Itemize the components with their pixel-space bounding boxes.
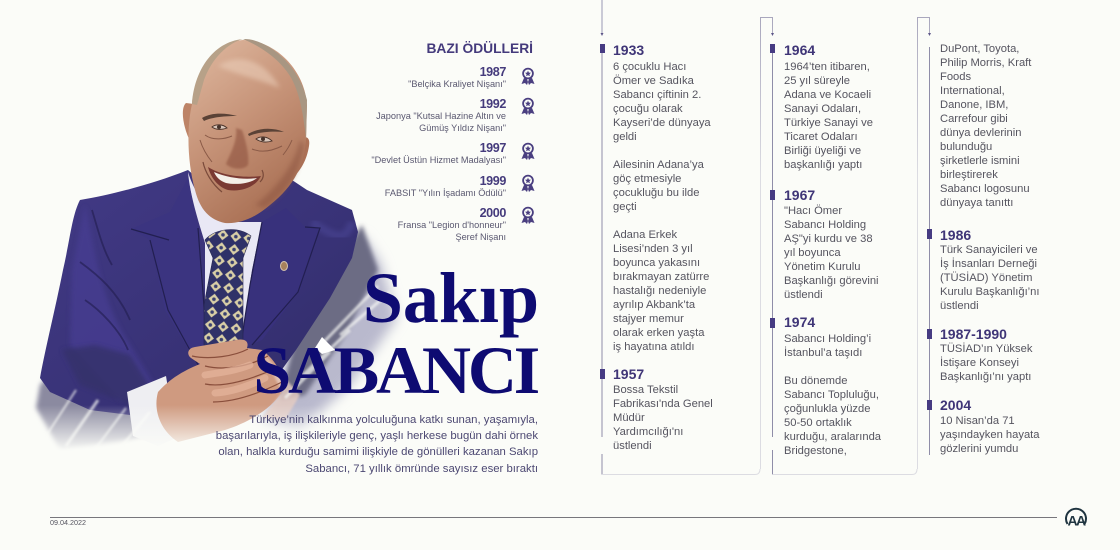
text 1974 [784, 333, 881, 457]
text 1986: (TÜSİAD) Yönetim [940, 272, 1032, 284]
text 1933 [613, 61, 711, 353]
year 1957: 1957 [613, 366, 644, 382]
award 1999: 1999 [480, 174, 506, 188]
text 1987-1990: Başkanlığı’nı yaptı [940, 371, 1031, 383]
intro paragraph: Türkiye’nin kalkınma yolculuğuna katkı sunan, yaşamıyla, [249, 414, 538, 426]
text 1967: yıl boyunca [784, 247, 841, 259]
text 1987-1990: İstişare Konseyi [940, 357, 1019, 369]
timeline column 1 [613, 42, 713, 452]
text continued: dünya devlerinin [940, 127, 1021, 139]
name title: Sakıp [363, 258, 539, 338]
text 1964: 1964’ten itibaren, [784, 61, 870, 73]
awards heading: BAZI ÖDÜLLERİ [426, 41, 533, 56]
text 1974: 50-50 ortaklık [784, 417, 852, 429]
text 1933: ayrılıp Akbank’ta [613, 299, 695, 311]
intro paragraph: olan, halkla kurduğu samimi ilişkiyle de gönülleri kazanan Sakıp [218, 446, 538, 458]
intro paragraph [216, 414, 538, 475]
text 1986: üstlendi [940, 300, 979, 312]
award 1992: Japonya "Kutsal Hazine Altın ve [376, 111, 506, 121]
text 1974: İstanbul’a taşıdı [784, 347, 862, 359]
text continued: bulunduğu [940, 141, 992, 153]
text continued: dünyaya tanıttı [940, 197, 1013, 209]
text 1964: Adana ve Kocaeli [784, 89, 871, 101]
text 1986: İş İnsanları Derneği [940, 258, 1037, 270]
text 1957: Yardımcılığı'nı [613, 426, 683, 438]
award medal icons [522, 68, 534, 224]
text 1967: Yönetim Kurulu [784, 261, 860, 273]
award 2000: 2000 [480, 206, 506, 220]
text continued: Danone, IBM, [940, 99, 1008, 111]
text 1957: üstlendi [613, 440, 652, 452]
year 1967: 1967 [784, 187, 815, 203]
text 1957 [613, 384, 713, 452]
text 1933: 6 çocuklu Hacı [613, 61, 686, 73]
text 1933: bırakmayan zatürre [613, 271, 709, 283]
text 1964: Ticaret Odaları [784, 131, 858, 143]
award 2000: Fransa "Legion d'honneur" [398, 220, 506, 230]
text 1964: Türkiye Sanayi ve [784, 117, 873, 129]
text 1967: AŞ"yi kurdu ve 38 [784, 233, 873, 245]
text 1964: Birliği üyeliği ve [784, 145, 861, 157]
text 1964: başkanlığı yaptı [784, 159, 862, 171]
award 1999: FABSIT "Yılın İşadamı Ödülü" [385, 188, 506, 198]
year 1974: 1974 [784, 314, 815, 330]
text 1967: "Hacı Ömer [784, 205, 842, 217]
text continued: Sabancı logosunu [940, 183, 1030, 195]
text 1933: geldi [613, 131, 637, 143]
year 1933: 1933 [613, 42, 644, 58]
text 1974: Bridgestone, [784, 445, 847, 457]
text 1933: Ailesinin Adana’ya [613, 159, 704, 171]
award 1999 [385, 174, 506, 198]
text continued [940, 43, 1032, 209]
year 1964: 1964 [784, 42, 815, 58]
text 1933: boyunca yakasını [613, 257, 700, 269]
award 1997: "Devlet Üstün Hizmet Madalyası" [371, 155, 506, 165]
text 1933: stajyer memur [613, 313, 684, 325]
text 1933: geçti [613, 201, 637, 213]
award 2000 [398, 206, 506, 242]
award 1992: Gümüş Yıldız Nişanı" [419, 122, 506, 132]
lapels [131, 178, 320, 372]
award 1997: 1997 [480, 141, 506, 155]
text 1957: Müdür [613, 412, 645, 424]
award 1987: "Belçika Kraliyet Nişanı" [408, 79, 506, 89]
text 1957: Bossa Tekstil [613, 384, 678, 396]
text 1986 [940, 244, 1040, 312]
text 1967 [784, 204, 879, 301]
text 1933: Lisesi’nden 3 yıl [613, 243, 693, 255]
text 1933: çocuğu olarak [613, 103, 683, 115]
text 1987-1990 [940, 342, 1032, 383]
date: 09.04.2022 [50, 518, 86, 527]
brush fade strokes [20, 286, 390, 471]
award 1987 [408, 65, 506, 89]
head and face [183, 39, 309, 223]
suit jacket [40, 170, 358, 420]
text 1974: Bu dönemde [784, 375, 847, 387]
necktie [204, 230, 251, 352]
text 1933: Sabancı çiftinin 2. [613, 89, 701, 101]
text 1967: üstlendi [784, 289, 823, 301]
text 1964: 25 yıl süreyle [784, 75, 850, 87]
text 1974: Sabancı Holding’i [784, 333, 871, 345]
year 2004: 2004 [940, 397, 971, 413]
award 1992 [376, 97, 506, 133]
text 2004 [940, 415, 1040, 455]
text continued: DuPont, Toyota, [940, 43, 1019, 55]
timeline column 2 [784, 42, 881, 457]
hands [127, 339, 300, 446]
lapel pin [280, 262, 288, 270]
text 1933: hastalığı nedeniyle [613, 285, 706, 297]
text continued: Philip Morris, Kraft [940, 57, 1031, 69]
text continued: şirketlerle ismini [940, 155, 1020, 167]
text 1974: kurduğu, aralarında [784, 431, 881, 443]
text 1987-1990: TÜSİAD’ın Yüksek [940, 343, 1032, 355]
text continued: International, [940, 85, 1005, 97]
text 1967: Sabancı Holding [784, 219, 866, 231]
intro paragraph: Sabancı, 71 yıllık ömründe sayısız eser bıraktı [305, 463, 538, 475]
text continued: birleştirerek [940, 169, 998, 181]
text 1933: Adana Erkek [613, 229, 677, 241]
text 2004: yaşındayken hayata [940, 429, 1040, 441]
text 1986: Kurulu Başkanlığı’nı [940, 286, 1040, 298]
shirt [188, 172, 262, 345]
name title: SABANCI [253, 332, 537, 408]
text continued: Carrefour gibi [940, 113, 1008, 125]
timeline markers [600, 44, 932, 410]
text 1933: göç etmesiyle [613, 173, 681, 185]
award 1997 [371, 141, 506, 165]
text 1974: Sabancı Topluluğu, [784, 389, 879, 401]
year 1986: 1986 [940, 227, 971, 243]
timeline column 3 [940, 43, 1040, 455]
text 1967: Başkanlığı görevini [784, 275, 879, 287]
award 1987: 1987 [480, 65, 506, 79]
text 1964: Sanayi Odaları, [784, 103, 861, 115]
agency logo [1065, 508, 1087, 528]
text 1933: çocukluğu bu ilde [613, 187, 699, 199]
text 1964 [784, 61, 873, 171]
award 2000: Şeref Nişanı [455, 232, 506, 242]
name title [253, 258, 539, 408]
year 1987-1990: 1987-1990 [940, 326, 1007, 342]
text 1974: çoğunlukla yüzde [784, 403, 870, 415]
text 1957: Fabrikası'nda Genel [613, 398, 713, 410]
text 1933: iş hayatına atıldı [613, 341, 694, 353]
award 1992: 1992 [480, 97, 506, 111]
brush shading behind suit [36, 225, 397, 450]
text 1933: Kayseri’de dünyaya [613, 117, 711, 129]
text 1933: Ömer ve Sadıka [613, 75, 694, 87]
text continued: Foods [940, 71, 971, 83]
text 2004: gözlerini yumdu [940, 443, 1018, 455]
text 2004: 10 Nisan’da 71 [940, 415, 1015, 427]
text 1933: olarak erken yaşta [613, 327, 704, 339]
intro paragraph: başarılarıyla, iş ilişkileriyle genç, yaşlı herkese bugün dahi örnek [216, 430, 538, 442]
text 1986: Türk Sanayicileri ve [940, 244, 1038, 256]
